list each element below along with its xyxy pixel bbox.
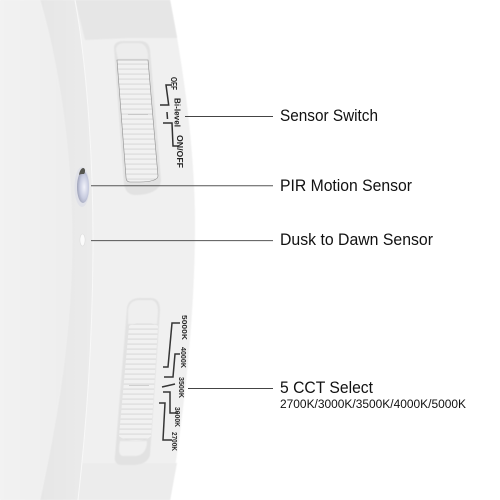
fixture body outer rim bbox=[0, 0, 195, 500]
sensor dark top bbox=[79, 168, 85, 175]
CCT labels: 2700K bbox=[170, 432, 177, 451]
switch labels: OFF bbox=[169, 77, 178, 90]
CCT values: 2700K/3000K/3500K/4000K/5000K bbox=[280, 399, 466, 411]
CCT labels: 4000K bbox=[179, 347, 186, 368]
label: PIR motion sensor: PIR Motion Sensor bbox=[280, 177, 412, 195]
side band bbox=[40, 0, 93, 500]
switch labels: Bi-level bbox=[172, 98, 182, 127]
sensor dome bbox=[77, 171, 89, 203]
leader line: PIR motion sensor bbox=[91, 185, 273, 187]
leader line: sensor switch bbox=[185, 116, 273, 118]
CCT labels: 3500K bbox=[177, 377, 184, 398]
rim highlight line bbox=[75, 0, 93, 500]
CCT recess lower highlight bbox=[119, 441, 147, 456]
CCT select switch bbox=[115, 298, 187, 465]
switch labels: ON/OFF bbox=[175, 135, 184, 168]
switch labels bbox=[169, 77, 184, 168]
CCT labels: 3000K bbox=[173, 407, 180, 427]
CCT recess upper highlight bbox=[128, 300, 158, 324]
label: 5 CCT select bbox=[280, 379, 466, 411]
label: sensor switch: Sensor Switch bbox=[280, 107, 378, 125]
switch recess top highlight bbox=[116, 43, 148, 59]
sensor lens bbox=[74, 167, 90, 207]
diffuser lens bbox=[0, 0, 72, 500]
sensor switch bbox=[114, 41, 184, 195]
switch centre mark bbox=[128, 114, 148, 115]
leader line: dusk to dawn sensor bbox=[91, 240, 273, 242]
CCT recess bbox=[115, 298, 160, 465]
product: light fixture side view bbox=[0, 0, 195, 500]
switch slider bbox=[117, 60, 158, 182]
rim top shaded section bbox=[75, 0, 177, 40]
CCT slider bbox=[119, 323, 158, 440]
PIR motion sensor bbox=[74, 167, 90, 207]
switch position traces bbox=[160, 85, 178, 146]
CCT labels: 5000K bbox=[180, 315, 187, 340]
CCT labels bbox=[170, 315, 187, 451]
label: dusk to dawn sensor: Dusk to Dawn Sensor bbox=[280, 231, 433, 249]
leader line: CCT select bbox=[188, 388, 273, 390]
switch recess bbox=[114, 41, 161, 195]
CCT heading: 5 CCT Select bbox=[280, 379, 373, 397]
dusk to dawn sensor bbox=[80, 234, 85, 246]
CCT position traces bbox=[159, 323, 180, 440]
CCT centre mark bbox=[129, 385, 149, 386]
rim bottom shaded section bbox=[78, 463, 177, 500]
